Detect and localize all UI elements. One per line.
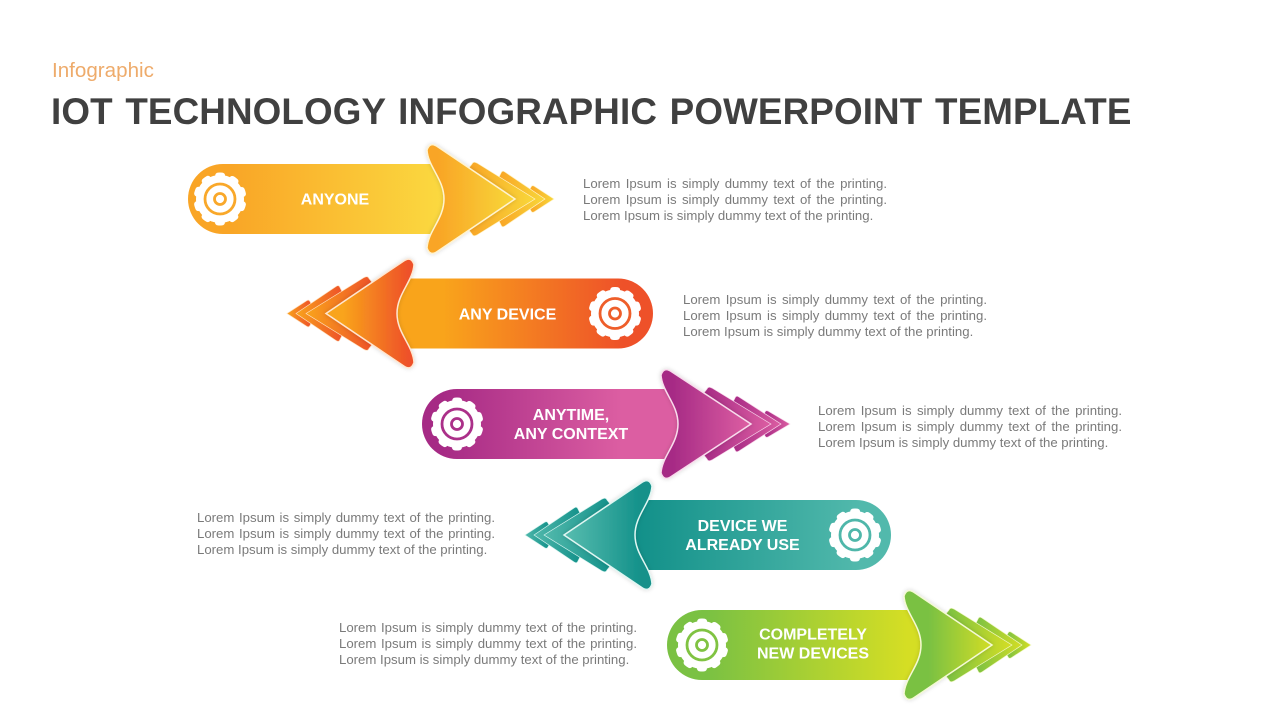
label: anytime, any context: ANYTIME,: [533, 407, 609, 424]
text block: completely new devices: Lorem Ipsum is simply dummy text of the printing.: [339, 652, 629, 667]
text block: completely new devices: [339, 620, 637, 667]
text block: any device: Lorem Ipsum is simply dummy text of the printing.: [683, 308, 987, 323]
label: anyone: ANYONE: [301, 192, 370, 208]
label: any device: ANY DEVICE: [459, 306, 557, 324]
text block: anytime: Lorem Ipsum is simply dummy text of the printing.: [818, 403, 1122, 418]
text block: anyone: [583, 176, 887, 223]
icon: gear: [678, 621, 726, 669]
text block: any device: [683, 292, 987, 339]
arrow 2: any device: [287, 259, 653, 368]
arrow 1: anyone: [188, 145, 554, 253]
text block: any device: Lorem Ipsum is simply dummy text of the printing.: [683, 292, 987, 307]
text block: any device: Lorem Ipsum is simply dummy text of the printing.: [683, 324, 973, 339]
text block: device we already use: Lorem Ipsum is simply dummy text of the printing.: [197, 510, 495, 525]
text block: anytime: Lorem Ipsum is simply dummy text of the printing.: [818, 419, 1122, 434]
text block: device we already use: Lorem Ipsum is simply dummy text of the printing.: [197, 542, 487, 557]
label: completely new devices: COMPLETELY: [759, 626, 867, 644]
text block: completely new devices: Lorem Ipsum is simply dummy text of the printing.: [339, 636, 637, 651]
text block: anyone: Lorem Ipsum is simply dummy text of the printing.: [583, 208, 873, 223]
arrow 3: anytime, any context: [422, 370, 790, 478]
arrow 3: anytime, any context: ANY CONTEXT: [514, 426, 628, 443]
arrow 5: completely new devices: NEW DEVICES: [757, 646, 869, 662]
icon: gear: [831, 511, 879, 559]
arrow 4: device we already use: [525, 481, 891, 589]
text block: anyone: Lorem Ipsum is simply dummy text of the printing.: [583, 176, 887, 191]
subtitle: Infographic: [52, 59, 154, 82]
text block: anytime: Lorem Ipsum is simply dummy text of the printing.: [818, 435, 1108, 450]
text block: anytime: [818, 403, 1122, 450]
label: device we already use: DEVICE WE: [698, 518, 788, 535]
text block: completely new devices: Lorem Ipsum is simply dummy text of the printing.: [339, 620, 637, 635]
title: IOT TECHNOLOGY INFOGRAPHIC POWERPOINT TEMPLATE: [51, 91, 1131, 132]
icon: gear: [196, 175, 244, 223]
icon: gear: [591, 290, 639, 338]
text block: device we already use: Lorem Ipsum is simply dummy text of the printing.: [197, 526, 495, 541]
text block: device we already use: [197, 510, 495, 557]
text block: anyone: Lorem Ipsum is simply dummy text of the printing.: [583, 192, 887, 207]
icon: gear: [433, 400, 481, 448]
arrow 5: completely new devices: [667, 591, 1031, 699]
arrow 4: device we already use: ALREADY USE: [685, 537, 800, 554]
